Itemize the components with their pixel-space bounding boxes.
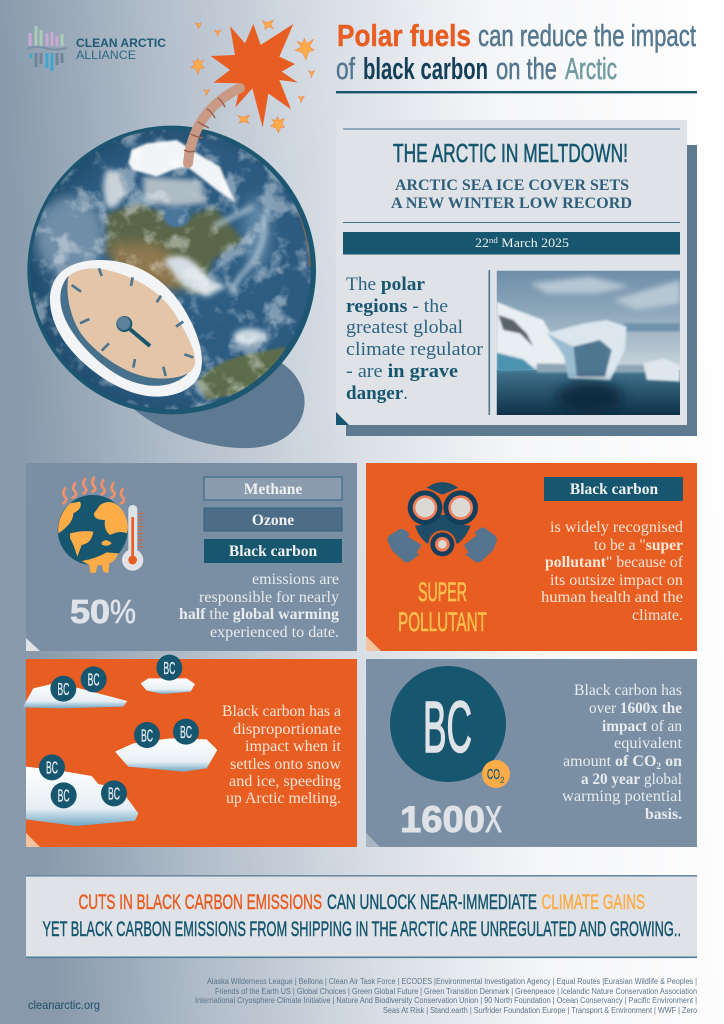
explosion and sparks	[191, 20, 315, 133]
text: 1600x impact: 2	[656, 761, 662, 771]
icebergs with BC particles	[23, 655, 217, 826]
icon: CO2 circle: 2	[500, 776, 505, 785]
icebergs with BC particles: BC	[108, 784, 120, 804]
text: disproportionate impact: up Arctic melting.	[226, 790, 341, 807]
member organisations	[195, 977, 698, 1015]
text: polar regions	[346, 274, 484, 404]
text: 1600x impact: basis.	[645, 806, 682, 823]
text: polar regions: danger.	[346, 383, 408, 404]
title: Arctic	[565, 51, 617, 86]
fuse	[184, 88, 240, 163]
text: 1600x impact: equivalent	[614, 735, 683, 752]
stat: 1600X: 1600	[400, 799, 485, 840]
label boxes: Methane	[244, 481, 302, 498]
date bar: 22	[475, 236, 488, 250]
heading: super pollutant	[398, 577, 487, 637]
text: polar regions: regions - the	[346, 296, 448, 317]
text: polar regions: climate regulator	[346, 339, 484, 360]
title: of	[336, 51, 355, 86]
label boxes: Black carbon	[229, 543, 318, 560]
icebergs with BC particles: BC	[141, 725, 153, 745]
date bar: nd	[489, 236, 498, 245]
title: on the	[496, 51, 557, 86]
panel: super pollutant	[366, 463, 697, 651]
panel: the Arctic in meltdown	[336, 120, 697, 436]
icebergs with BC particles: BC	[58, 786, 70, 806]
date bar: March 2025	[498, 236, 569, 250]
callout: climate gains	[26, 875, 697, 958]
text: 1600x impact	[562, 682, 683, 823]
icon: BC circle: BC	[423, 688, 472, 768]
text: 1600x impact: amount of CO	[563, 753, 655, 770]
text: disproportionate impact: and ice, speeding	[229, 773, 341, 790]
text: super pollutant: its outsize impact on	[550, 572, 683, 589]
text: super pollutant: human health and the	[541, 589, 683, 606]
callout: climate gains: CUTS IN BLACK CARBON EMISSIONS	[78, 891, 322, 914]
heading: super pollutant: POLLUTANT	[398, 607, 487, 637]
text: super pollutant	[541, 519, 684, 624]
text: 1600x impact: a 20 year global	[581, 771, 682, 788]
text: disproportionate impact	[222, 703, 342, 807]
stat: 50%: 50	[70, 593, 110, 630]
text: emissions	[179, 571, 339, 641]
icebergs with BC particles: BC	[57, 679, 69, 699]
member organisations: Seas At Risk | Stand.earth | Surfrider Foundation Europe | Transport & Environment | WWF | Zero	[383, 1006, 698, 1015]
text: super pollutant: to be a "super	[594, 537, 683, 554]
icon: BC circle	[390, 666, 506, 782]
globe	[27, 126, 317, 414]
text: disproportionate impact: settles onto snow	[230, 756, 342, 773]
text: emissions: responsible for nearly	[199, 589, 339, 606]
stat: 50%	[70, 593, 136, 630]
text: disproportionate impact: impact when it	[245, 738, 342, 755]
stat: 1600X: X	[485, 799, 502, 840]
icon: melting earth with thermometer	[58, 478, 143, 573]
gauge	[50, 260, 202, 397]
label: black carbon	[544, 477, 683, 501]
logo: Clean Arctic Alliance: ALLIANCE	[76, 48, 136, 62]
heading: super pollutant: SUPER	[418, 577, 467, 607]
text: super pollutant: is widely recognised	[550, 519, 683, 536]
text: 1600x impact: Black carbon has	[574, 682, 682, 699]
icon: gas mask	[387, 482, 497, 563]
callout: climate gains: CLIMATE GAINS	[542, 891, 645, 914]
logo: Clean Arctic Alliance	[27, 26, 166, 71]
illustration: globe bomb	[27, 20, 317, 448]
text: disproportionate impact: Black carbon has a	[222, 703, 341, 720]
text: 1600x impact: warming potential	[562, 788, 682, 805]
website: cleanarctic.org	[28, 998, 100, 1012]
logo: Clean Arctic Alliance: CLEAN ARCTIC	[76, 36, 166, 50]
text: emissions: half the global warming	[179, 606, 339, 623]
text: disproportionate impact: disproportionate	[233, 721, 341, 738]
photo: iceberg	[497, 271, 680, 415]
icon: CO2 circle: CO	[487, 766, 500, 783]
panel subheading: A NEW WINTER LOW RECORD	[391, 195, 632, 212]
globe shadow	[125, 340, 305, 448]
icebergs with BC particles: BC	[180, 722, 192, 742]
title: Polar fuels	[337, 18, 471, 53]
title: black carbon	[363, 51, 488, 86]
panel subheading	[391, 177, 632, 212]
text: polar regions: The polar	[346, 274, 426, 295]
text: 1600x impact: over 1600x the	[589, 700, 682, 717]
text: emissions: experienced to date.	[210, 624, 339, 641]
icebergs with BC particles: BC	[88, 670, 100, 690]
text: 1600x impact: on	[661, 753, 682, 770]
callout: climate gains: CAN UNLOCK NEAR-IMMEDIATE	[327, 891, 537, 914]
label: black carbon: Black carbon	[570, 481, 659, 498]
title	[336, 18, 697, 93]
text: 1600x impact: impact of an	[602, 718, 682, 735]
icebergs with BC particles: BC	[163, 658, 175, 678]
text: emissions: emissions are	[252, 571, 339, 588]
text: polar regions: greatest global	[346, 317, 463, 338]
text: polar regions: - are in grave	[346, 361, 458, 382]
date bar	[343, 232, 680, 254]
panel: ice melting	[23, 655, 357, 847]
label boxes: Ozone	[252, 512, 294, 529]
text: super pollutant: pollutant" because of	[545, 554, 684, 571]
icebergs with BC particles: BC	[46, 758, 58, 778]
stat: 50%: %	[110, 593, 136, 630]
label boxes	[204, 477, 342, 563]
panel: 50% warming	[26, 463, 357, 651]
text: super pollutant: climate.	[632, 607, 683, 624]
panel subheading: ARCTIC SEA ICE COVER SETS	[395, 177, 629, 194]
panel: 1600x	[366, 659, 697, 847]
icon: CO2 circle	[482, 760, 510, 788]
